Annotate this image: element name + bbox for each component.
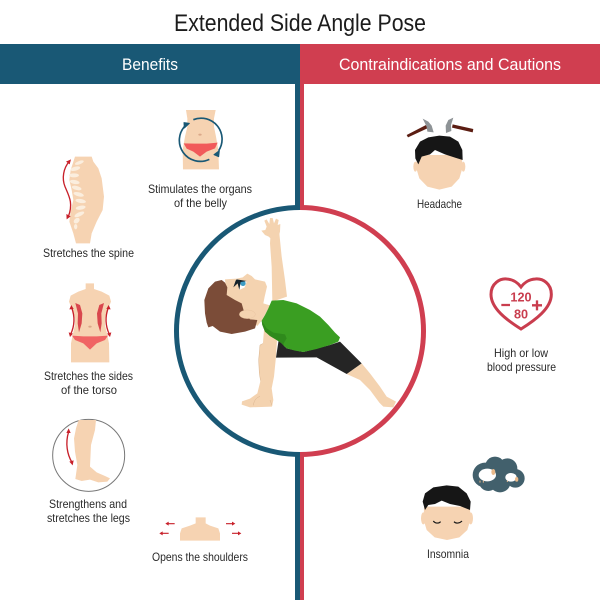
yoga figure — [204, 218, 396, 407]
circle: right half — [300, 208, 424, 454]
icon: blood pressure heart — [491, 279, 551, 329]
label: stretches the sides — [44, 369, 133, 397]
icon: blood pressure heart: 80 — [514, 307, 528, 321]
icon: belly — [179, 110, 222, 169]
icon: spine — [63, 157, 104, 243]
icon: torso sides — [69, 283, 111, 362]
panel header: contraindications — [300, 44, 600, 84]
label: insomnia: Insomnia — [427, 547, 469, 561]
label: strengthens the legs — [47, 497, 130, 525]
label: strengthens the legs: stretches the legs — [47, 511, 130, 525]
center divider: blue — [295, 84, 300, 600]
label: blood pressure: High or low — [494, 346, 548, 360]
panel header: contraindications: Contraindications and Cautions — [339, 55, 561, 74]
icon: sheep thought cloud — [473, 457, 525, 492]
panel header: benefits: Benefits — [122, 55, 178, 74]
icon: leg — [53, 419, 125, 491]
label: stretches the sides: Stretches the sides — [44, 369, 133, 383]
label: blood pressure — [487, 346, 556, 374]
panel header: benefits — [0, 44, 300, 84]
label: headache: Headache — [417, 197, 462, 211]
label: stimulates the organs: Stimulates the organs — [148, 182, 252, 196]
label: stimulates the organs: of the belly — [174, 196, 227, 210]
icon: headache — [407, 118, 473, 190]
icon: blood pressure heart: 120 — [510, 290, 532, 304]
label: stretches the spine: Stretches the spine — [43, 246, 134, 260]
center divider: red — [300, 84, 304, 600]
title: Extended Side Angle Pose — [174, 10, 426, 37]
label: blood pressure: blood pressure — [487, 360, 556, 374]
label: opens the shoulders: Opens the shoulders — [152, 550, 248, 564]
icon: shoulders — [159, 517, 241, 541]
icon: insomnia head — [421, 485, 473, 540]
label: stretches the sides: of the torso — [61, 383, 117, 397]
label: strengthens the legs: Strengthens and — [49, 497, 127, 511]
circle: left half — [177, 208, 300, 454]
label: stimulates the organs — [148, 182, 252, 210]
